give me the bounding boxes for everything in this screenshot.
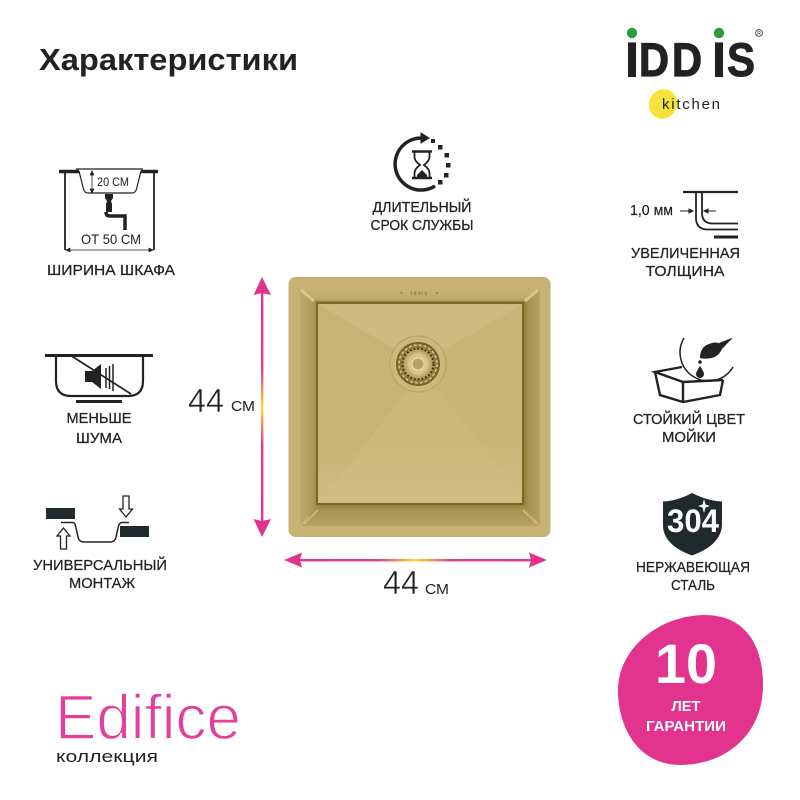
icon: universal mounting [46,496,149,549]
dimension: height 44 cm: 44 [188,382,224,419]
label: stainless steel: НЕРЖАВЕЮЩАЯ [636,559,750,576]
warranty badge [618,615,763,765]
label: less noise: МЕНЬШЕ [66,410,132,427]
icon: cabinet width: ОТ 50 СМ [81,231,141,247]
title: Характеристики [39,42,298,77]
icon: color-resistant sink [655,338,733,402]
label: increased thickness: УВЕЛИЧЕННАЯ [631,245,740,262]
sink rim [288,277,550,537]
drain strainer [390,336,446,392]
label: stainless steel: СТАЛЬ [671,577,715,594]
label: universal mounting: МОНТАЖ [69,575,135,592]
dimension: height 44 cm: СМ [231,398,255,415]
brand mark: Iddis [411,291,428,297]
label: long service life: СРОК СЛУЖБЫ [370,217,474,234]
icon: long service life [395,133,450,190]
logo: IDDIS kitchen: D [639,33,669,86]
sink basin floor [317,303,523,504]
icon: cabinet width: 20 СМ [97,175,129,189]
label: cabinet width: ШИРИНА ШКАФА [47,262,175,279]
icon: increased thickness: 1,0 мм [630,202,673,219]
logo: IDDIS kitchen: I [713,33,725,86]
logo: IDDIS kitchen: S [727,33,755,86]
collection name: Edifice [55,683,241,753]
dimension: width 44 cm: СМ [425,581,449,598]
icon: increased thickness [630,192,738,237]
logo: IDDIS kitchen: R [757,31,761,37]
icon: less noise [45,355,153,402]
sink walls [300,288,540,526]
label: universal mounting [33,556,167,592]
label: less noise: ШУМА [76,430,122,447]
icon: stainless steel 304 [663,493,722,556]
warranty badge: ЛЕТ [672,698,700,715]
sink photo [288,277,550,537]
icon: cabinet width [59,169,158,252]
logo: IDDIS kitchen: D [672,33,702,86]
logo: IDDIS kitchen [626,28,762,124]
icon: stainless steel 304: 304 [667,503,719,539]
label: universal mounting: УНИВЕРСАЛЬНЫЙ [33,556,167,574]
label: color-resistant sink [633,410,745,446]
label: increased thickness [631,245,740,280]
arrow: sink width [284,552,547,568]
collection name: коллекция [56,748,158,766]
label: increased thickness: ТОЛЩИНА [646,263,724,280]
dimension: height 44 cm [188,382,255,419]
logo: IDDIS kitchen: kitchen [662,96,720,113]
label: color-resistant sink: МОЙКИ [662,428,716,446]
label: less noise [66,410,132,447]
label: long service life: ДЛИТЕЛЬНЫЙ [372,198,472,216]
label: stainless steel [636,559,750,594]
dimension: width 44 cm: 44 [383,564,419,601]
label: long service life [370,198,474,234]
label: color-resistant sink: СТОЙКИЙ ЦВЕТ [633,410,745,428]
arrow: sink height [254,277,271,537]
dimension: width 44 cm [383,564,449,601]
warranty badge: 10 [655,632,717,695]
logo: IDDIS kitchen: I [626,33,638,86]
warranty badge: ГАРАНТИИ [646,718,726,735]
